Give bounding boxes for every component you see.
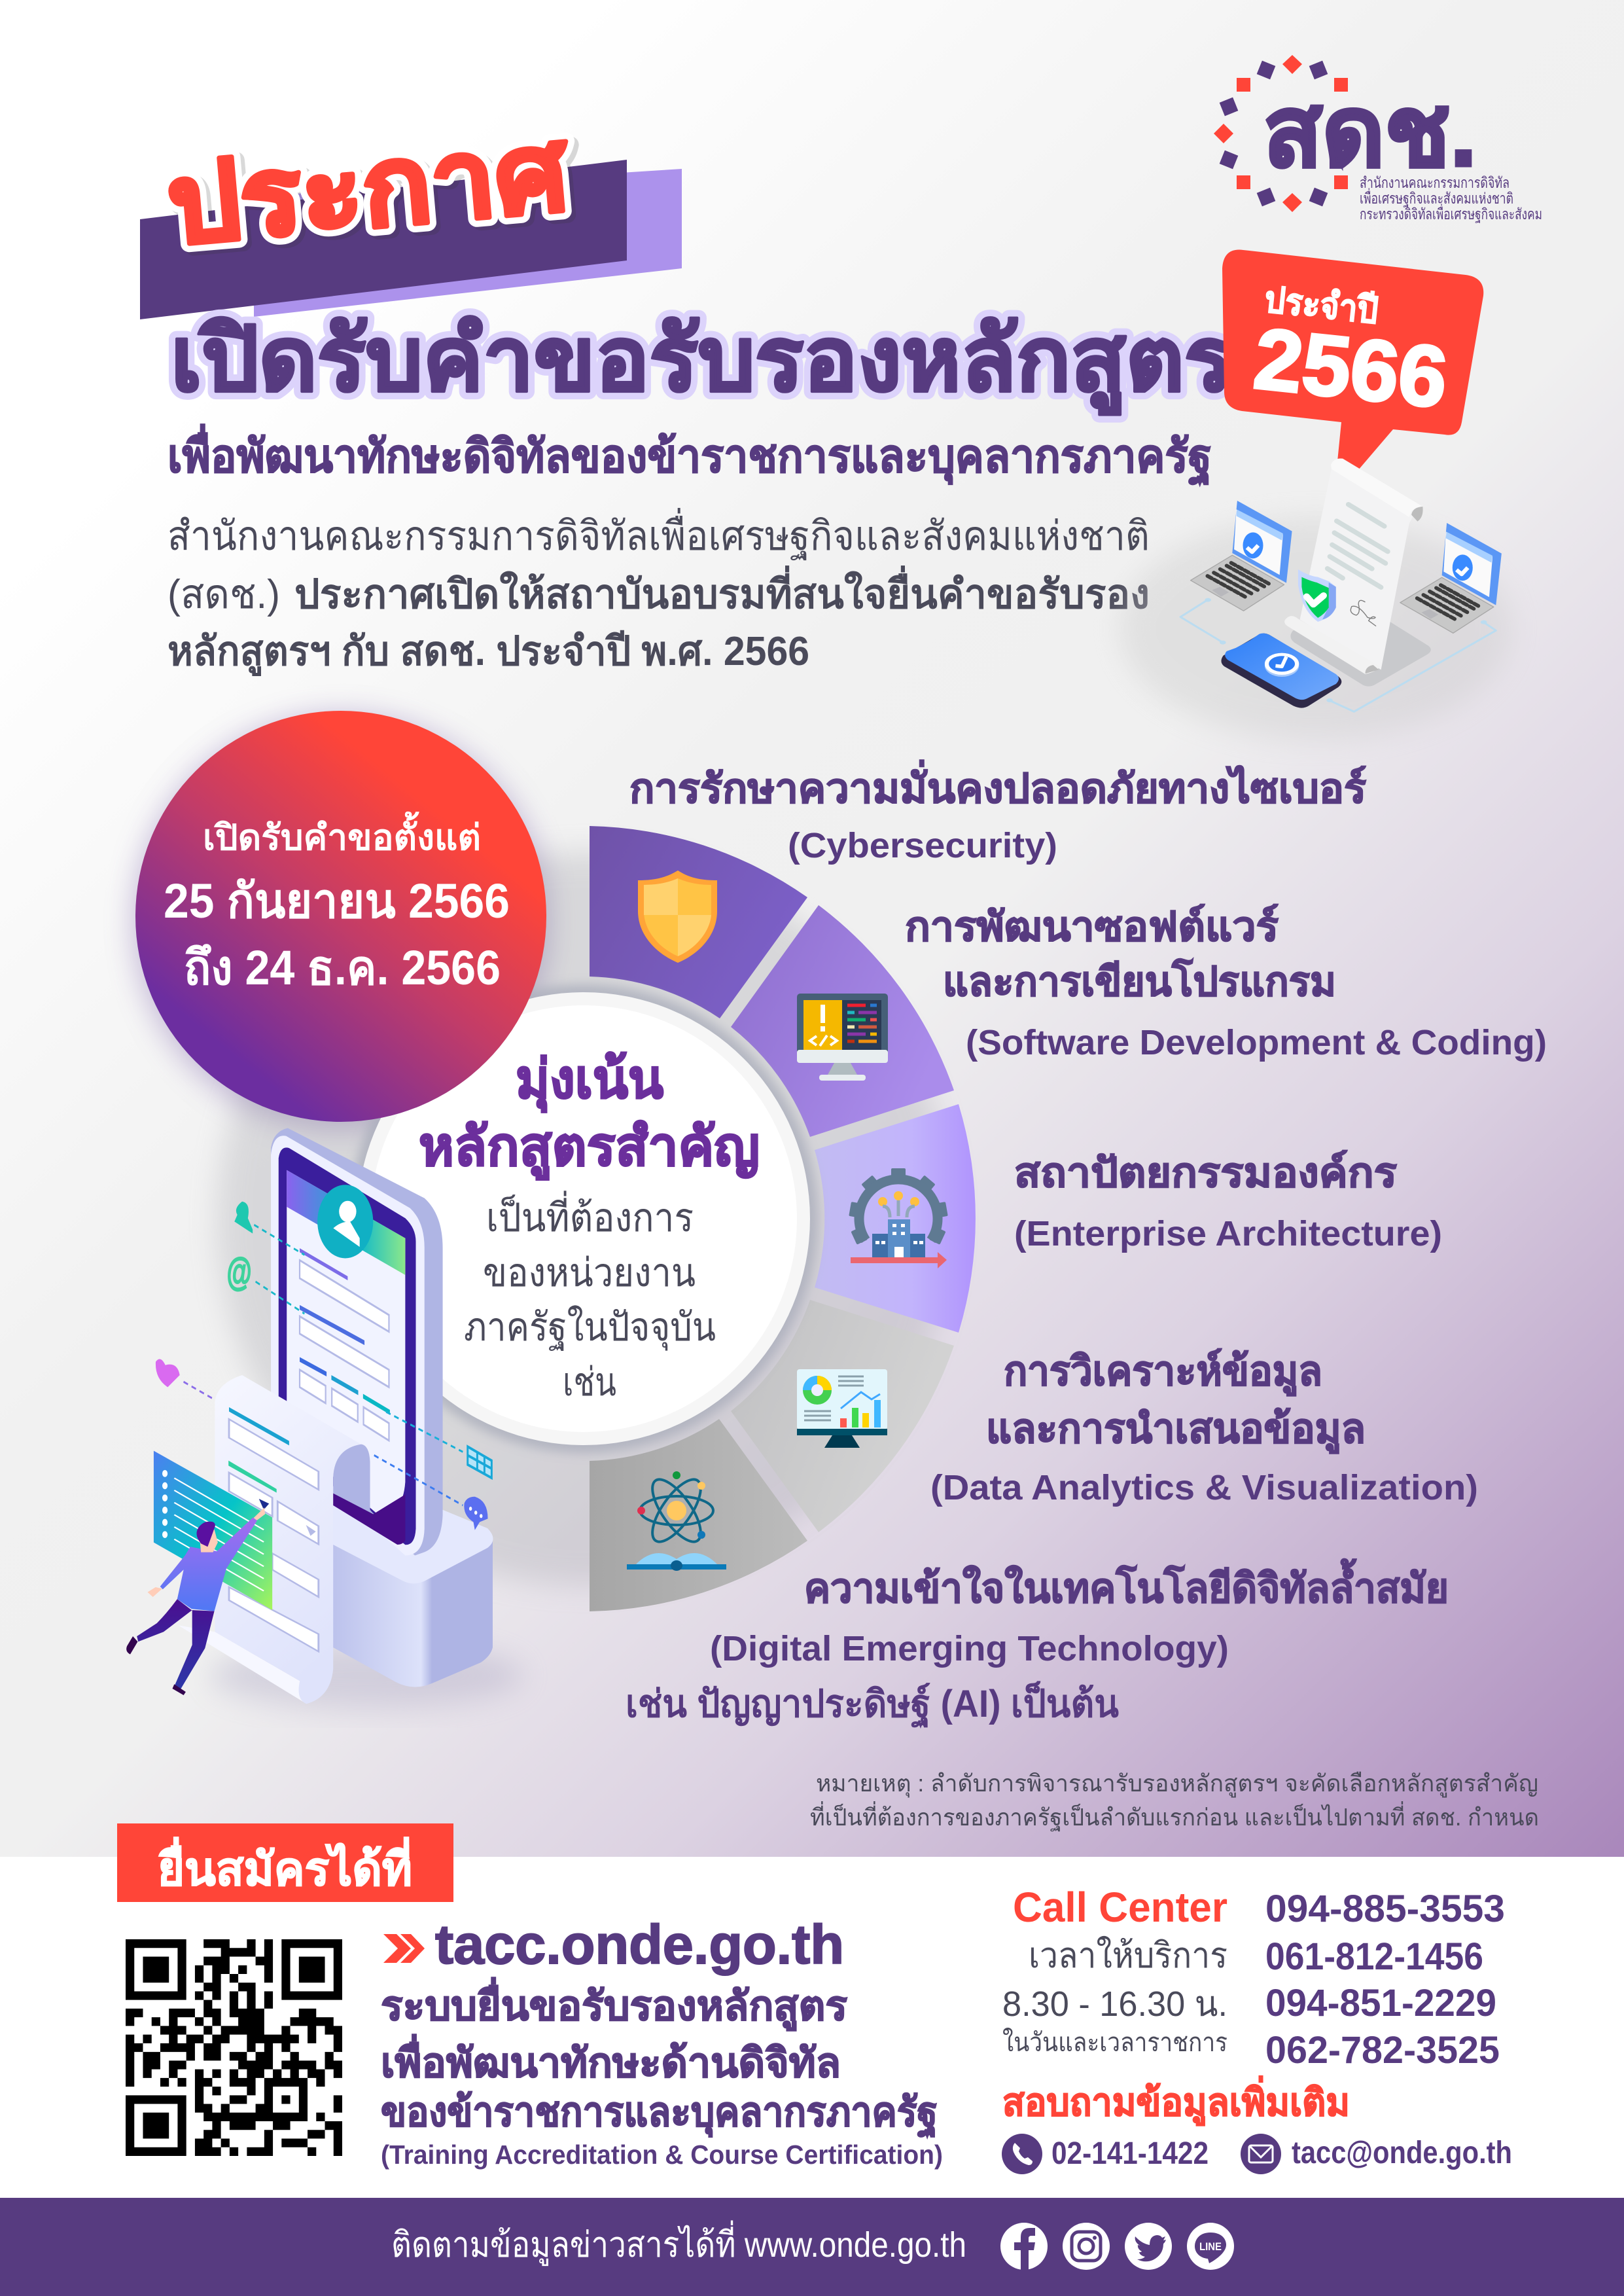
course label: cybersecurity: การรักษาความมั่นคงปลอดภัยทางไซเบอร์ [629, 760, 1366, 812]
icon: shield [638, 870, 717, 963]
course label: cybersecurity: (Cybersecurity) [788, 826, 1057, 865]
icon: facebook [1000, 2223, 1048, 2270]
icon: gear with buildings [849, 1168, 948, 1268]
banner dark purple strip [140, 160, 627, 319]
course label: data analytics [930, 1348, 1478, 1507]
icon: phone [1002, 2134, 1042, 2174]
center heading: มุ่งเน้น [516, 1050, 663, 1113]
end date: ถึง 24 ธ.ค. 2566 [184, 941, 501, 995]
logo org name [1360, 174, 1542, 223]
segment: cybersecurity [590, 826, 807, 1018]
service hours: 8.30 - 16.30 น. [1002, 1984, 1227, 2024]
intro text block: (สดช.) [168, 572, 280, 617]
banner: announcement [140, 109, 682, 319]
course label: enterprise architecture [1014, 1150, 1442, 1253]
document text lines [1328, 505, 1388, 587]
center description: เป็นที่ต้องการ [486, 1191, 694, 1240]
icon: code monitor [797, 994, 888, 1081]
course label: enterprise architecture: สถาปัตยกรรมองค์กร [1014, 1150, 1397, 1196]
course label: emerging technology: ความเข้าใจในเทคโนโลยีดิจิทัลล้ำสมัย [804, 1558, 1449, 1611]
center heading [419, 1050, 760, 1180]
pedestal [333, 1505, 493, 1687]
icon: instagram [1063, 2223, 1110, 2270]
center description: ของหน่วยงาน [483, 1251, 696, 1295]
dashed connectors [184, 1225, 463, 1505]
service hours: เวลาให้บริการ [1029, 1935, 1227, 1975]
course label: software: (Software Development & Coding) [966, 1023, 1547, 1062]
apply here tag: ยื่นสมัครได้ที่ [158, 1837, 412, 1895]
course label: data analytics: การวิเคราะห์ข้อมูล [1004, 1348, 1322, 1396]
white contact band [0, 1857, 1624, 2198]
segment: emerging technology [590, 1419, 807, 1611]
website address: tacc.onde.go.th [435, 1914, 844, 1975]
english system name: (Training Accreditation & Course Certification) [381, 2140, 943, 2170]
icon: mail [1241, 2134, 1281, 2174]
date circle [135, 711, 546, 1122]
curl end [1411, 507, 1423, 522]
system description [381, 1977, 938, 2138]
email address: tacc@onde.go.th [1292, 2136, 1512, 2170]
call center block [1002, 1884, 1512, 2174]
footer band [0, 2198, 1624, 2296]
icon: line [1187, 2223, 1234, 2270]
logo org name: เพื่อเศรษฐกิจและสังคมแห่งชาติ [1360, 188, 1513, 207]
course label: software: การพัฒนาซอฟต์แวร์ [905, 904, 1279, 950]
main title: เปิดรับคำขอรับรองหลักสูตร [171, 310, 1233, 415]
course label: cybersecurity [629, 760, 1366, 865]
service hours: ในวันและเวลาราชการ [1002, 2027, 1227, 2057]
phone numbers: 062-782-3525 [1265, 2029, 1500, 2072]
phone screen [279, 1147, 416, 1545]
course label: emerging technology: เช่น ปัญญาประดิษฐ์ (AI) เป็นต้น [626, 1681, 1119, 1729]
date label: เปิดรับคำขอตั้งแต่ [203, 812, 481, 857]
laptop left [1191, 501, 1292, 611]
paper fold [333, 1444, 381, 1517]
illustration: phone form with person [126, 1128, 523, 1708]
center heading: หลักสูตรสำคัญ [419, 1117, 760, 1180]
wheel shadow [217, 852, 950, 1585]
intro text block: ประกาศเปิดให้สถาบันอบรมที่สนใจยื่นคำขอรับรอง [294, 565, 1150, 617]
phone header [287, 1170, 405, 1275]
laptop right [1400, 523, 1502, 633]
bubble year: 2566 [1250, 310, 1452, 426]
logo org name: สำนักงานคณะกรรมการดิจิทัล [1360, 174, 1509, 191]
heading: announce: ประกาศ [167, 113, 578, 270]
course label: software [905, 904, 1547, 1062]
logo ring of squares [1214, 55, 1348, 212]
radial wheel of courses [217, 826, 976, 1611]
phone device [1221, 634, 1341, 708]
call center heading: Call Center [1013, 1884, 1227, 1931]
website block [381, 1914, 943, 2170]
year speech bubble [1222, 250, 1483, 475]
intro text block [168, 508, 1150, 676]
icon: contact [234, 1202, 253, 1234]
system description: เพื่อพัฒนาทักษะด้านดิจิทัล [381, 2034, 841, 2086]
document sheet [1300, 463, 1416, 670]
center description: เช่น [563, 1360, 616, 1404]
heading: announce: ประกาศ [163, 109, 574, 267]
phone body [156, 1128, 491, 1556]
icon: line: LINE [1199, 2240, 1222, 2253]
document top curl [1331, 459, 1422, 517]
course label: data analytics: และการนำเสนอข้อมูล [986, 1407, 1366, 1454]
logo org name: กระทรวงดิจิทัลเพื่อเศรษฐกิจและสังคม [1360, 204, 1542, 223]
system description: ระบบยื่นขอรับรองหลักสูตร [381, 1977, 847, 2031]
illustration: document with laptops and phone [1180, 459, 1502, 711]
stage shadow [209, 1643, 523, 1708]
icon: chart monitor [797, 1369, 887, 1448]
course label: enterprise architecture: (Enterprise Architecture) [1014, 1214, 1442, 1253]
course label: software: และการเขียนโปรแกรม [943, 958, 1336, 1005]
icon: atom and book [627, 1471, 726, 1571]
heading: announce: ประกาศ [163, 109, 574, 267]
main title: เปิดรับคำขอรับรองหลักสูตร [171, 310, 1233, 415]
segment: software development [731, 905, 954, 1137]
signature [1350, 600, 1376, 626]
center description [464, 1191, 716, 1404]
red date circle shadow [133, 713, 549, 1130]
banner light purple strip [254, 169, 682, 317]
icon: chat [464, 1497, 488, 1530]
circuit lines [1180, 600, 1496, 711]
phone numbers [1265, 1888, 1505, 2072]
logo: ONDE [1214, 55, 1542, 223]
segment: data analytics [731, 1300, 954, 1532]
paper form [154, 1375, 405, 1704]
floor shadow [1290, 622, 1431, 687]
QR code [126, 1939, 342, 2156]
icon: calendar [468, 1446, 491, 1478]
bubble label: ประจำปี [1263, 278, 1380, 331]
footnote: ที่เป็นที่ต้องการของภาครัฐเป็นลำดับแรกก่อน และเป็นไปตามที่ สดช. กำหนด [810, 1801, 1539, 1832]
more information heading: สอบถามข้อมูลเพิ่มเติม [1002, 2075, 1350, 2126]
course label: data analytics: (Data Analytics & Visualization) [930, 1468, 1478, 1507]
document bottom roll [1284, 616, 1380, 674]
phone form fields [300, 1248, 390, 1441]
circle [135, 711, 546, 1122]
gradient list panel [154, 1451, 272, 1610]
circuit dots [1205, 598, 1487, 702]
center description: ภาครัฐในปัจจุบัน [464, 1305, 716, 1351]
apply here tag [117, 1823, 453, 1902]
person [126, 1507, 265, 1695]
intro text block: หลักสูตรฯ กับ สดช. ประจำปี พ.ศ. 2566 [168, 629, 809, 676]
footnote: หมายเหตุ : ลำดับการพิจารณารับรองหลักสูตรฯ จะคัดเลือกหลักสูตรสำคัญ [816, 1770, 1538, 1798]
arrows icon [383, 1934, 425, 1963]
subtitle: เพื่อพัฒนาทักษะดิจิทัลของข้าราชการและบุคลากรภาครัฐ [168, 423, 1212, 486]
icon: at sign: @ [227, 1249, 252, 1293]
system description: ของข้าราชการและบุคลากรภาครัฐ [381, 2090, 938, 2138]
footnote [810, 1770, 1539, 1832]
footer text: ติดตามข้อมูลข่าวสารได้ที่ www.onde.go.th [391, 2220, 966, 2266]
service hours [1002, 1935, 1227, 2057]
shield badge [1298, 569, 1336, 622]
phone numbers: 061-812-1456 [1265, 1935, 1483, 1978]
phone numbers: 094-885-3553 [1265, 1888, 1505, 1930]
bubble shape [1222, 250, 1483, 475]
course label: emerging technology [626, 1558, 1449, 1729]
course label: emerging technology: (Digital Emerging Technology) [710, 1629, 1229, 1668]
direct phone number: 02-141-1422 [1051, 2136, 1209, 2171]
segment: enterprise architecture [815, 1104, 976, 1333]
phone numbers: 094-851-2229 [1265, 1982, 1496, 2024]
intro text block: สำนักงานคณะกรรมการดิจิทัลเพื่อเศรษฐกิจและสังคมแห่งชาติ [168, 508, 1150, 560]
center disc [349, 984, 818, 1453]
paper fields [229, 1419, 319, 1651]
illustration halo [1119, 517, 1511, 740]
icon: heart [156, 1359, 180, 1387]
avatar [317, 1185, 373, 1258]
start date: 25 กันยายน 2566 [164, 874, 510, 928]
logo wordmark: สดช. [1263, 77, 1477, 187]
icon: twitter [1125, 2223, 1172, 2270]
